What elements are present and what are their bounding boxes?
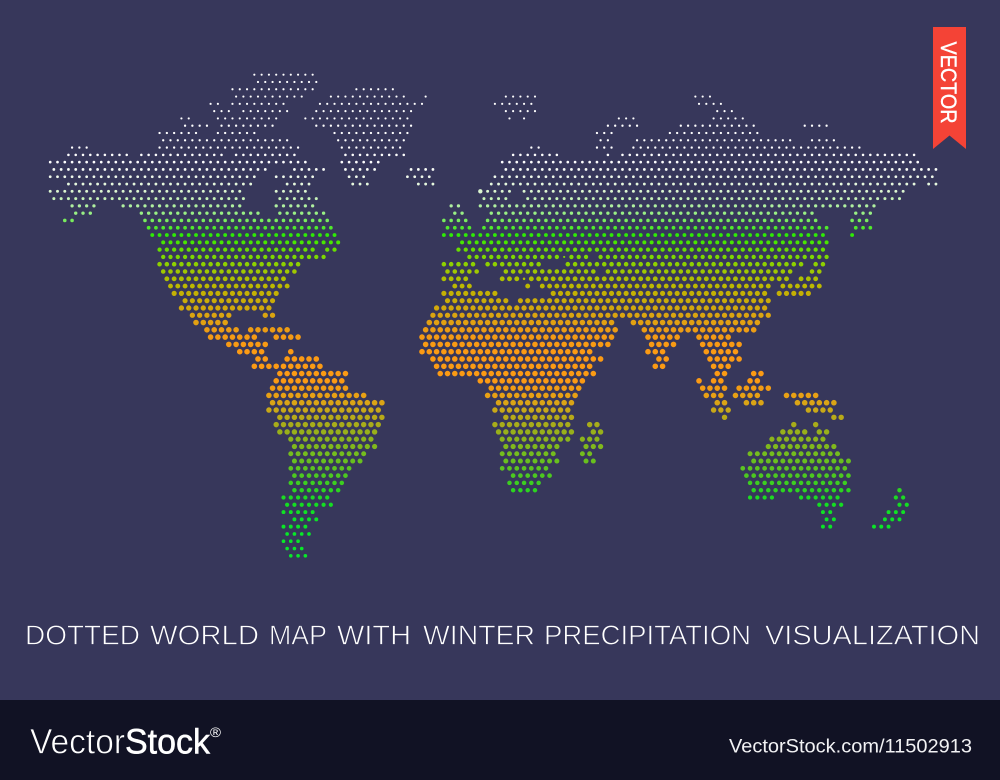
continent: Greenland (305, 89, 426, 184)
title: WITH (337, 619, 411, 650)
footer bar (0, 700, 1000, 780)
logo: VectorStock (30, 722, 222, 761)
island: New Zealand (874, 490, 907, 527)
title: VISUALIZATION (765, 619, 980, 650)
title: MAP (269, 619, 327, 650)
island: Madagascar (582, 425, 601, 461)
logo: VectorStock: Stock (125, 722, 210, 761)
logo: VectorStock: Vector (30, 722, 125, 761)
island: Iceland (407, 169, 433, 184)
image id: VectorStock.com/11502913 (729, 737, 972, 758)
continent: Australia (743, 425, 849, 527)
title: PRECIPITATION (544, 619, 751, 650)
continent: Africa and Arabia (422, 293, 615, 490)
islands: Southeast Asia (699, 374, 841, 417)
logo: VectorStock: ® (210, 724, 222, 740)
continent: Eurasia (444, 97, 936, 374)
title (25, 619, 980, 650)
dotted world map (50, 75, 936, 556)
continent: North America (50, 75, 338, 359)
title: WORLD (150, 619, 259, 650)
title: WINTER (423, 619, 535, 650)
title: DOTTED (25, 619, 140, 650)
ribbon: vector badge (933, 27, 966, 149)
ribbon: vector badge: VECTOR (936, 42, 961, 124)
continent: South America (254, 352, 382, 556)
